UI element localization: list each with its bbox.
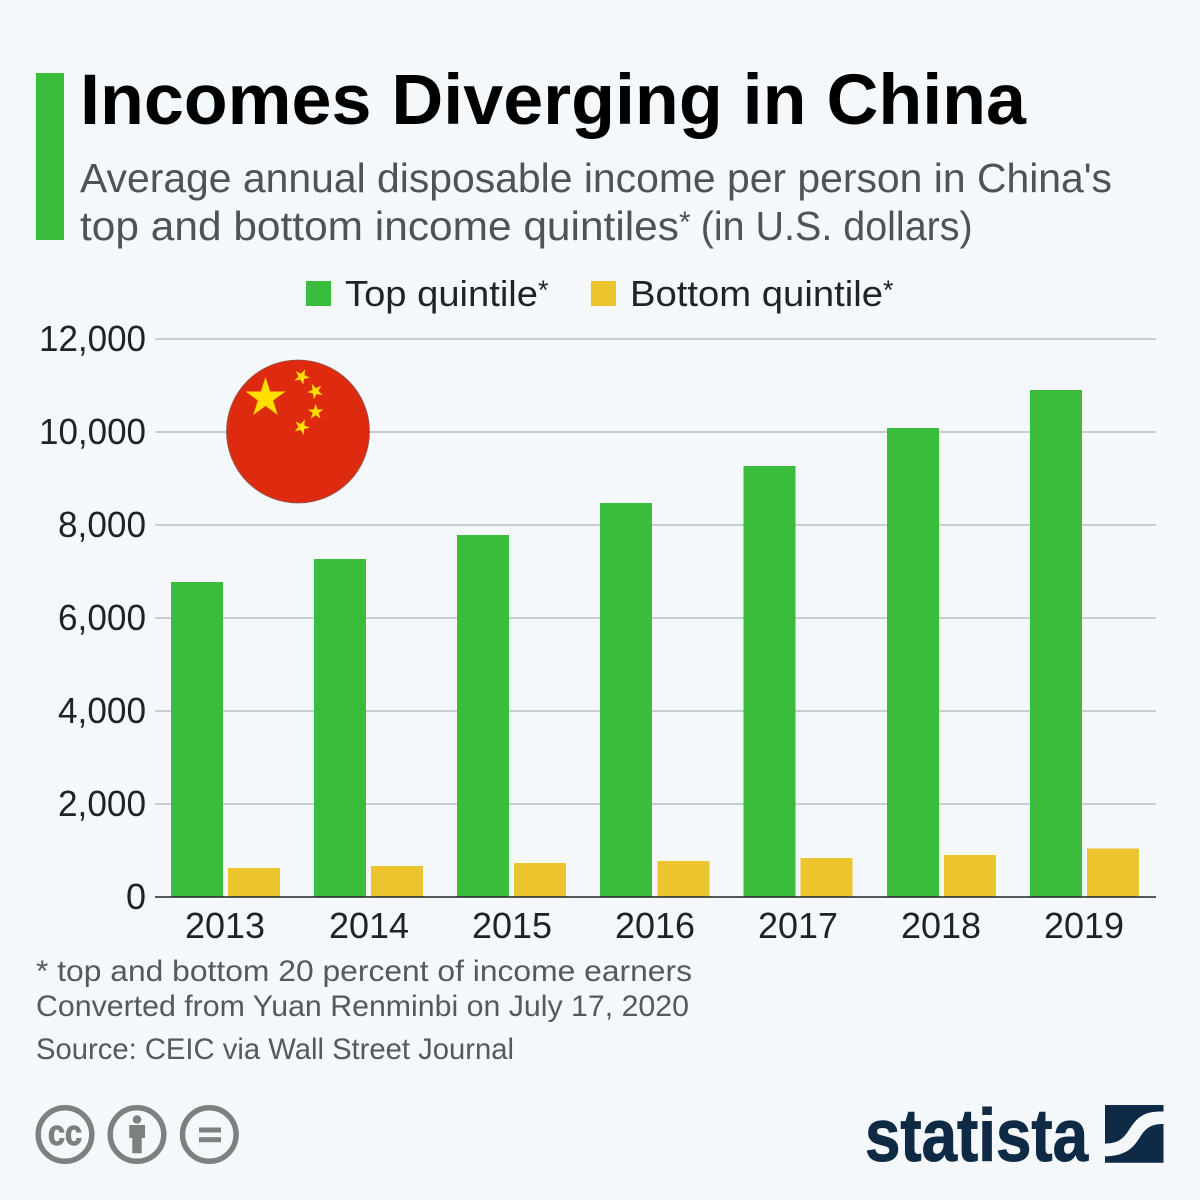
icon: creative commons: cc — [48, 1112, 82, 1153]
legend — [306, 273, 894, 314]
y axis labels: 10,000 — [39, 411, 146, 452]
x axis labels: 2019 — [1044, 905, 1124, 946]
footnotes: Source: CEIC via Wall Street Journal — [36, 1033, 514, 1066]
x axis labels: 2018 — [901, 905, 981, 946]
axis baseline — [155, 896, 1156, 898]
gridlines — [155, 339, 1156, 804]
y axis labels: 8,000 — [58, 504, 146, 545]
legend: * — [883, 275, 894, 305]
subtitle: * — [679, 206, 691, 239]
subtitle: top and bottom income quintiles — [80, 203, 679, 249]
subtitle: Average annual disposable income per person in China's — [80, 155, 1112, 201]
title accent bar — [36, 73, 64, 240]
y axis labels: 2,000 — [58, 783, 146, 824]
icon: China flag — [226, 360, 370, 503]
icon: creative commons — [38, 1108, 92, 1161]
bar chart: top quintile — [171, 390, 1082, 897]
bar chart: bottom quintile — [228, 848, 1139, 897]
subtitle: (in U.S. dollars) — [701, 203, 973, 249]
x axis labels: 2017 — [758, 905, 838, 946]
y axis labels: 0 — [126, 876, 146, 917]
footnotes: Converted from Yuan Renminbi on July 17, 2020 — [36, 990, 689, 1023]
legend: Bottom quintile — [630, 273, 883, 314]
x axis labels: 2013 — [185, 905, 265, 946]
logo: statista: statista — [865, 1094, 1089, 1177]
x axis labels — [185, 905, 1124, 946]
x axis labels: 2016 — [615, 905, 695, 946]
subtitle — [80, 155, 1112, 249]
y axis labels — [39, 318, 146, 917]
y axis labels: 6,000 — [58, 597, 146, 638]
y axis labels: 12,000 — [39, 318, 146, 359]
title: Incomes Diverging in China — [80, 61, 1027, 140]
footnotes — [36, 955, 692, 1066]
legend: Top quintile — [345, 273, 538, 314]
legend: * — [538, 275, 549, 305]
x axis labels: 2014 — [329, 905, 409, 946]
icon: no derivatives — [182, 1108, 236, 1161]
y axis labels: 4,000 — [58, 690, 146, 731]
footnotes: * top and bottom 20 percent of income earners — [36, 955, 692, 988]
icon: attribution — [110, 1108, 164, 1161]
x axis labels: 2015 — [472, 905, 552, 946]
